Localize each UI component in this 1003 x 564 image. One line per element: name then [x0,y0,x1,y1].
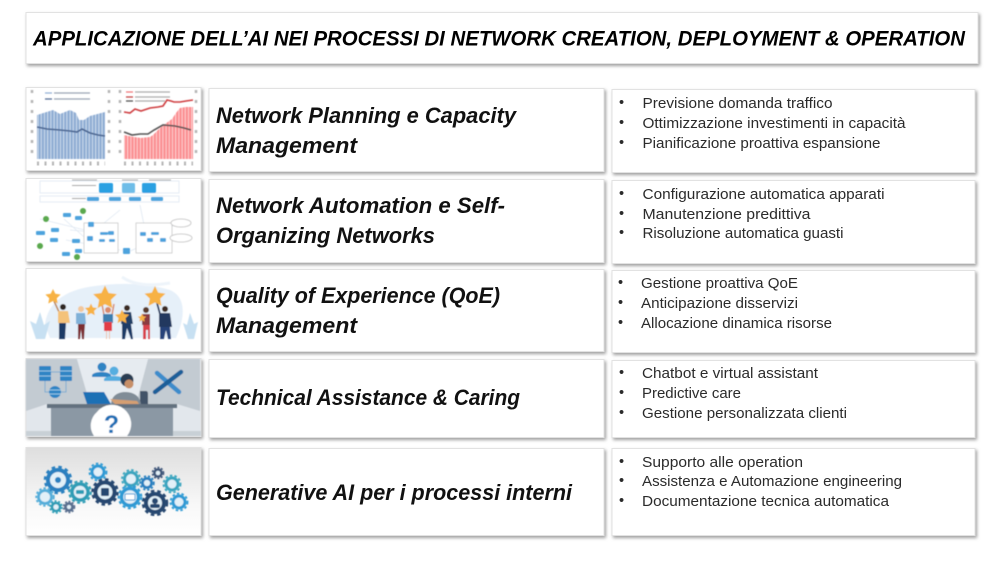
icon: wrench and screwdriver [155,372,181,392]
list: network planning: • [619,115,624,131]
icon: stars [45,286,165,323]
list: QoE: • [618,295,623,311]
list: QoE: Anticipazione disservizi [641,296,798,312]
heading: technical assistance [209,360,604,438]
list: technical assistance [612,360,975,438]
list: network automation [612,180,975,264]
heading: QoE: Management [216,313,359,338]
icon: plants [30,312,198,339]
list: QoE [612,270,975,352]
heading: generative AI: Generative AI per i processi interni [216,480,573,505]
icon: agent with laptop [83,374,148,405]
list: network automation: • [619,225,624,241]
heading: QoE: Quality of Experience (QoE) [216,283,500,308]
icon: user silhouettes [92,362,124,381]
heading: QoE [209,270,604,352]
list: generative AI [612,448,975,536]
list: generative AI: • [619,493,624,509]
list: network planning: • [619,135,624,151]
icon: desk [47,404,177,436]
list: QoE: • [618,275,623,291]
list: technical assistance: Predictive care [642,386,741,402]
list: QoE: • [618,315,623,331]
icon: gears [36,464,188,515]
list: generative AI: Documentazione tecnica automatica [642,494,890,510]
list: technical assistance: • [619,385,624,401]
list: QoE: Gestione proattiva QoE [641,276,798,292]
chart: blue investment bars [32,90,109,164]
list: network automation: Manutenzione predittiva [642,207,812,223]
heading: network automation: Network Automation e Self- [216,193,505,218]
panel: generative AI image (gears) [26,448,201,536]
list: generative AI: • [619,454,624,470]
list: network automation: Risoluzione automatica guasti [642,226,844,242]
panel: technical assistance image (agent at desk) [26,358,201,439]
panel: network planning image (charts) [26,88,201,170]
list: technical assistance: Gestione personalizzata clienti [642,406,847,422]
list: network planning: Ottimizzazione investimenti in capacità [642,116,906,132]
chart: red investment bars [120,90,196,164]
title: APPLICAZIONE DELL’AI NEI PROCESSI DI NETWORK CREATION, DEPLOYMENT & OPERATION [32,28,966,50]
panel: QoE image (people holding stars) [26,268,201,352]
list: network planning: Pianificazione proattiva espansione [642,136,880,152]
icon: people [54,301,172,339]
list: technical assistance: • [619,365,624,381]
panel: network automation image (diagram) [26,178,201,262]
heading: generative AI [209,448,604,536]
list: generative AI: • [619,473,624,489]
list: network automation: • [619,206,624,222]
list: generative AI: Supporto alle operation [642,455,803,471]
heading: network automation: Organizing Networks [216,223,435,248]
heading: network planning: Network Planning e Capacity [216,103,517,128]
list: technical assistance: Chatbot e virtual assistant [642,366,818,382]
icon: server stack [39,366,72,398]
heading: network planning: Management [216,133,359,158]
list: network planning: • [619,95,624,111]
title [26,12,978,64]
list: QoE: Allocazione dinamica risorse [641,316,832,332]
heading: network automation [209,180,604,262]
list: network planning: Previsione domanda traffico [642,96,832,112]
icon: question mark [91,405,131,439]
heading: technical assistance: Technical Assistance & Caring [216,385,520,410]
heading: network planning [209,88,604,172]
list: network automation: • [619,186,624,202]
list: technical assistance: • [619,405,624,421]
list: generative AI: Assistenza e Automazione engineering [642,474,902,490]
icon: question mark: ? [104,411,119,439]
list: network automation: Configurazione automatica apparati [642,187,884,203]
list: network planning [612,90,975,172]
